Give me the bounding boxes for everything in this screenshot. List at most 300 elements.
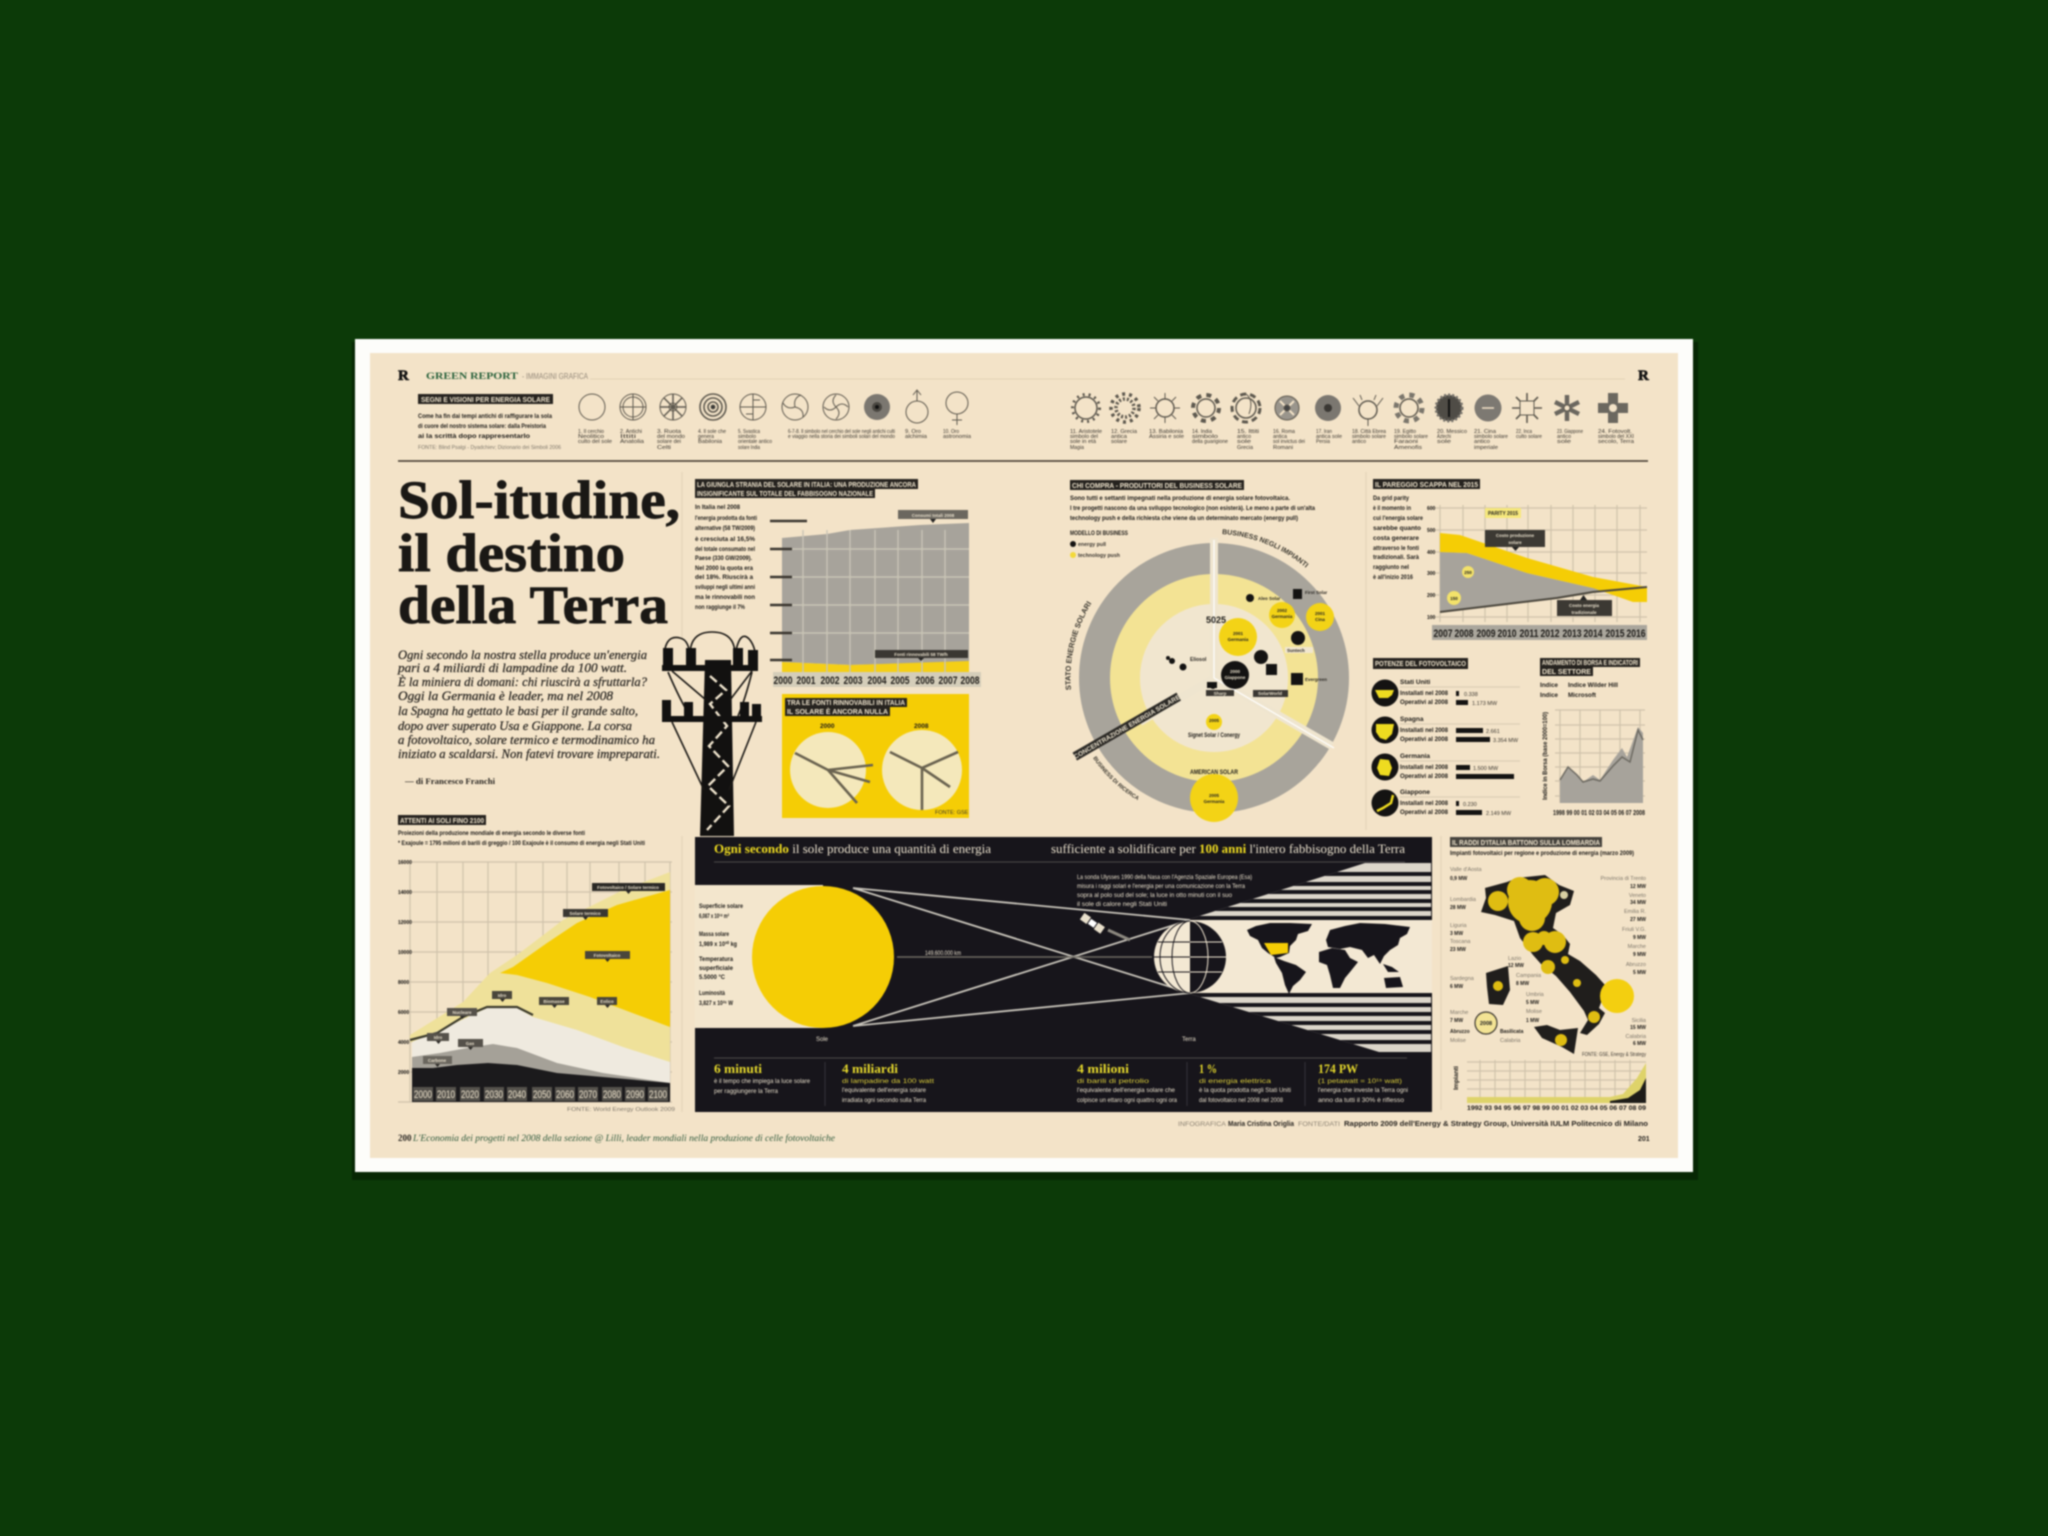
symbol labels right: 23. Giappone (1557, 429, 1583, 435)
chart text: del 18%. Riuscirà a (695, 574, 753, 581)
y axis labels: 8000 (398, 980, 409, 986)
sun facts: Superficie solare (699, 903, 743, 910)
stat: 174 PW: 174 PW (1318, 1061, 1358, 1076)
grid (1555, 710, 1645, 803)
panel: leading countries (1372, 658, 1520, 817)
text column: è il momento in (1373, 505, 1411, 512)
year labels: 2011 (1520, 628, 1538, 640)
symbol labels left: 9. Oro (905, 429, 921, 435)
intro paragraph: la Spagna ha gettato le basi per il grande salto, (398, 704, 638, 718)
symbol labels left: alchimia (905, 434, 928, 440)
row: Giappone: Operativi al 2008 (1400, 809, 1448, 816)
year labels: 2016 (1626, 628, 1646, 640)
callout labels: Idro (434, 1035, 443, 1040)
solar label (875, 650, 968, 661)
region labels right: Veneto (1629, 893, 1646, 899)
year axis: 2020 (461, 1089, 479, 1101)
y axis labels: 16000 (398, 860, 412, 866)
symbol labels right: 13. Babilonia (1149, 429, 1184, 435)
symbol labels left: culto del sole (578, 439, 612, 445)
symbol labels right: Aztechi (1437, 434, 1451, 440)
icon: male symbol (906, 390, 928, 423)
icon: sun 16 (1275, 396, 1299, 420)
row: Stati Uniti: 0.338 (1464, 692, 1478, 698)
symbol labels left (578, 429, 972, 451)
USA highlight (1264, 943, 1288, 955)
symbol labels right: antico (1474, 439, 1490, 445)
icon: triskele (782, 394, 808, 420)
callout labels: Biomasse (543, 999, 565, 1004)
region labels right: 15 MW (1630, 1025, 1646, 1031)
legend: Indice (1540, 682, 1558, 689)
bubble labels: Sharp (1214, 691, 1227, 696)
label: terra: Terra (1182, 1037, 1196, 1043)
axis title: Impianti (1453, 1066, 1460, 1090)
second series (1560, 730, 1643, 782)
heading tag: DEL SETTORE (1542, 669, 1591, 676)
stat: 1 percent: di energia elettrica (1199, 1078, 1272, 1085)
symbol labels right: simbolo solare (1394, 434, 1428, 440)
year axis: 2040 (508, 1089, 526, 1101)
panel: solar stocks chart (1540, 658, 1645, 817)
callout labels: Solare termico (569, 911, 601, 916)
logo left: R (398, 368, 409, 384)
chart text: Paese (330 GW/2009). (695, 555, 752, 562)
year axis: 2080 (603, 1089, 621, 1101)
region labels left: 6 MW (1450, 984, 1463, 990)
symbol labels left: del mondo (657, 434, 685, 440)
area: pale yellow (410, 872, 670, 1062)
yellow markers: 150 (1450, 596, 1458, 601)
main title: il destino (398, 523, 625, 583)
year labels: 2008 (960, 675, 980, 687)
yellow bubbles (1190, 602, 1334, 822)
region labels left: Abruzzo (1450, 1029, 1470, 1035)
symbol labels right: 17. Iran (1316, 429, 1332, 435)
stat: 174 PW: anno da tutti il 30% è riflesso (1318, 1098, 1405, 1104)
row: Spagna: Spagna (1400, 716, 1424, 723)
legend: Indice (1540, 692, 1558, 699)
year labels: 2012 (1540, 628, 1560, 640)
year labels (773, 672, 981, 687)
spoke line (1214, 540, 1334, 748)
bubble labels: 2000 (1230, 669, 1241, 674)
heading tag (418, 394, 553, 404)
gridlines (398, 862, 672, 1102)
main title (398, 470, 680, 635)
region labels left: 5 MW (1526, 1000, 1539, 1006)
light wedge (1187, 863, 1431, 1052)
symbol labels right: sole (1237, 439, 1251, 445)
stat dividers (825, 1062, 1305, 1106)
region labels left: Molise (1526, 1009, 1542, 1015)
region labels left: 3 MW (1450, 931, 1463, 937)
icon: cross circle (620, 394, 646, 420)
icon: cross with arcs (740, 394, 766, 420)
braces (672, 671, 756, 790)
symbol labels left: 10. Oro (943, 429, 959, 435)
upper crossarm (662, 665, 758, 671)
symbol labels left: astronomia (943, 434, 972, 440)
bubble labels: Eliosol (1190, 657, 1207, 663)
year axis: 2030 (485, 1089, 503, 1101)
satellite note: sopra al polo sud del sole; la luce in otto minuti con il suo (1077, 893, 1233, 899)
year labels: 2002 (820, 675, 840, 687)
white paper frame (355, 339, 1693, 1172)
bubble labels: 2001 (1315, 611, 1326, 616)
region labels left: 23 MW (1450, 947, 1466, 953)
year labels: 2007 (1434, 628, 1452, 640)
chart text: del totale consumato nel (695, 546, 755, 553)
cream behind sun (695, 885, 823, 1028)
section subtitle: - IMMAGINI GRAFICA (522, 372, 589, 381)
callout labels: Nucleare (452, 1010, 472, 1015)
text column: raggiunto nel (1373, 564, 1409, 571)
heading tag: ANDAMENTO DI BORSA E INDICATORI (1542, 660, 1638, 667)
legend: Microsoft (1568, 692, 1597, 699)
yellow tag: PARITY 2015 (1488, 511, 1518, 517)
solar label: Fonti rinnovabili 58 TW/h (894, 652, 948, 657)
trend area (1467, 1063, 1646, 1103)
dark line (410, 1007, 533, 1040)
stat: 1 percent (1199, 1061, 1291, 1104)
symbol row right (1072, 393, 1628, 426)
panel: industry circle (1064, 479, 1350, 823)
year axis: 2090 (626, 1089, 644, 1101)
sun facts: Massa solare (699, 931, 729, 938)
symbol labels right: 22. Inca (1516, 429, 1533, 435)
chart text: Nel 2000 la quota era (695, 565, 753, 572)
text column: cui l'energia solare (1373, 515, 1423, 522)
bubble labels: 2005 (1209, 718, 1220, 723)
legend (1070, 530, 1129, 559)
heading tag: POTENZE DEL FOTOVOLTAICO (1375, 661, 1466, 668)
chart text: non raggiunge il 7% (695, 604, 745, 611)
area: whitish (412, 1008, 670, 1102)
year axis: 2010 (437, 1089, 455, 1101)
black background (695, 837, 1432, 1112)
stat: 4 miliardi: irradiata ogni secondo sulla Terra (842, 1098, 927, 1104)
bubble labels: 2005 (1209, 793, 1220, 798)
distance label: 149.600.000 km (925, 951, 961, 957)
region labels left: Umbria (1526, 992, 1545, 998)
bubble labels: 2001 (1233, 631, 1244, 636)
text column: è all'inizio 2016 (1373, 574, 1413, 581)
row: Germania (1372, 753, 1514, 780)
intro paragraph: iniziato a scaldarsi. Non fatevi trovare impreparati. (398, 747, 660, 761)
heading tag: CHI COMPRA - PRODUTTORI DEL BUSINESS SOLARE (1072, 483, 1242, 490)
symbol labels right: sol invictus dei (1273, 439, 1305, 445)
callout labels: Fotovoltaico (594, 953, 621, 958)
region labels left: 12 MW (1508, 963, 1524, 969)
stat: 4 milioni: di barili di petrolio (1077, 1078, 1150, 1085)
year labels: 2004 (868, 675, 887, 687)
year axis: 2060 (556, 1089, 574, 1101)
credits: Maria Cristina Origlia (1228, 1121, 1294, 1128)
region labels left: Lazio (1508, 956, 1521, 962)
icon: sun 21 (1474, 394, 1502, 422)
stat: 6 minuti: 6 minuti (714, 1061, 762, 1076)
symbol labels left: solare India (738, 445, 761, 451)
region labels right: 9 MW (1633, 952, 1646, 958)
region labels left: Lombardia (1450, 897, 1477, 903)
callout labels: Fotovoltaico / Solare termico (597, 885, 659, 890)
credits: FONTE/DATI (1298, 1121, 1340, 1128)
icon: sun 23 (1555, 395, 1579, 421)
year axis (413, 1087, 668, 1101)
chart text: l'energia prodotta da fonti (695, 515, 757, 522)
intro paragraph: a fotovoltaico, solare termico e termodinamico ha (398, 733, 655, 747)
subtitle: Proiezioni della produzione mondiale di energia secondo le diverse fonti (398, 830, 585, 837)
source: FONTE: World Energy Outlook 2009 (567, 1107, 675, 1113)
settore label: 5025 (1206, 615, 1226, 625)
sun facts: 5.5000 °C (699, 973, 725, 981)
bubble labels: Cina (1315, 617, 1325, 622)
yellow markers (1447, 566, 1474, 605)
symbol labels right: simbolo solare (1474, 434, 1508, 440)
year labels: 2009 (1476, 628, 1496, 640)
grid (1428, 505, 1647, 622)
symbol labels right: Grecia (1237, 445, 1254, 451)
stat: 174 PW: l'energia che investe la Terra ogni (1318, 1088, 1408, 1094)
main title: Sol-itudine, (398, 470, 680, 530)
year labels: 2015 (1606, 628, 1624, 640)
black bubbles (1166, 589, 1305, 689)
symbol labels left: 5. Svastica (738, 429, 761, 435)
symbol labels right: sole (1557, 439, 1571, 445)
spokes (1140, 538, 1332, 746)
area: solar yellow (500, 890, 670, 1027)
intro paragraph: pari a 4 miliardi di lampadine da 100 watt. (397, 661, 627, 675)
bubble labels: SolarWorld (1258, 691, 1282, 696)
symbol labels right: Romani (1273, 445, 1293, 451)
stat: 4 milioni: l'equivalente dell'energia solare che (1077, 1088, 1176, 1094)
icon: sun 17 (1315, 395, 1341, 421)
total label (898, 510, 968, 523)
yellow box (782, 694, 969, 818)
world map (1247, 923, 1410, 994)
bubble labels: Germania (1204, 799, 1225, 804)
subtitle: * Exajoule = 1795 milioni di barili di greggio / 100 Exajoule è il consumo di energia negli Stati Uniti (398, 840, 645, 847)
region labels left: Molise (1450, 1038, 1466, 1044)
heading right: sufficiente a solidificare per 100 anni l'intero fabbisogno della Terra (1051, 841, 1405, 856)
stat: 6 minuti (714, 1061, 811, 1095)
description: di cuore del nostro sistema solare: dalla Preistoria (418, 423, 546, 430)
icon: sun 13 (1150, 393, 1180, 423)
callout labels: Eolico (600, 999, 614, 1004)
chart text (695, 504, 757, 611)
arc text: top right: BUSINESS NEGLI IMPIANTI (1222, 528, 1310, 568)
region labels right: 9 MW (1633, 935, 1646, 941)
source: FONTE: GSE (935, 810, 969, 816)
byline: — di Francesco Franchi (404, 776, 496, 786)
year labels: 2003 (844, 675, 862, 687)
symbol labels right: 12. Grecia (1111, 429, 1138, 435)
intro paragraph (397, 648, 660, 761)
bubble labels: Germania (1228, 637, 1249, 642)
icon: sun 24 cross (1598, 393, 1628, 423)
year labels: 2014 (1584, 628, 1603, 640)
icon: female symbol (946, 392, 968, 425)
stat: 1 percent: dal fotovoltaico nel 2008 nel 2008 (1199, 1098, 1284, 1104)
text column: sarebbe quanto (1373, 525, 1421, 532)
subtitle: Impianti fotovoltaici per regione e produzione di energia (marzo 2009) (1450, 850, 1634, 857)
icon: sun 14 (1193, 395, 1219, 421)
heading tag (1070, 480, 1244, 490)
intro paragraph: È la miniera di domani: chi riuscirà a sfruttarla? (397, 675, 648, 689)
chart text: alternative (58 TW/2009) (695, 525, 755, 532)
grey outer ring (1095, 559, 1333, 797)
y axis labels: 10000 (398, 950, 412, 956)
heading tag: INSIGNIFICANTE SUL TOTALE DEL FABBISOGNO NAZIONALE (697, 491, 873, 498)
symbol labels left: genera (698, 434, 715, 440)
main title: della Terra (398, 575, 668, 635)
national total (1475, 1012, 1497, 1034)
y axis (770, 521, 807, 660)
distance line (897, 956, 1152, 958)
symbol labels right: antico (1237, 434, 1251, 440)
row: Germania: 1.500 MW (1473, 766, 1499, 772)
region labels left: 1 MW (1526, 1018, 1539, 1024)
left chart: energy forecast to 2100 (398, 815, 675, 1113)
icon: circle (579, 394, 605, 420)
mini chart (1453, 1060, 1646, 1112)
national total: 2008 (1480, 1021, 1492, 1027)
source: FONTE: Blind Psalgi - Dyadchiev; Dizionario dei Simboli 2006 (418, 445, 561, 451)
text column (1373, 495, 1423, 581)
symbol labels right (1070, 429, 1635, 451)
legend (1540, 682, 1618, 699)
region labels right: 5 MW (1633, 970, 1646, 976)
credits: INFOGRAFICA (1178, 1121, 1227, 1128)
region labels right: Friuli V.G. (1622, 927, 1646, 933)
stripes (1187, 872, 1432, 1044)
icon: dark disc (864, 394, 890, 420)
region labels right: 12 MW (1630, 884, 1646, 890)
bubble labels: Giappone (1225, 675, 1246, 680)
dark area (1610, 1078, 1646, 1103)
row: Stati Uniti: 1.173 MW (1472, 701, 1498, 707)
bubble labels: AMERICAN SOLAR (1190, 769, 1238, 776)
symbol labels right: sole (1437, 439, 1451, 445)
heading tag (1373, 658, 1468, 669)
y axis labels: 300 (1427, 571, 1436, 577)
symbol labels left: Anatolia (620, 439, 645, 445)
symbol labels right: simbolo del (1070, 434, 1098, 440)
satellite beam (1108, 930, 1130, 940)
callout lower (1557, 595, 1612, 616)
total label: Consumi totali 2008 (912, 513, 955, 518)
dark line (1440, 587, 1647, 612)
intro paragraph: dopo aver superato Usa e Giappone. La corsa (398, 719, 632, 733)
y axis labels: 12000 (398, 920, 412, 926)
lower crossarm (662, 716, 762, 722)
panel: Italy map (1450, 837, 1647, 1112)
region labels left: Valle d'Aosta (1450, 867, 1482, 873)
tag (785, 698, 907, 716)
heading tag (1373, 479, 1480, 489)
pie 2008: 2008 (914, 723, 929, 730)
logo right: R (1638, 368, 1649, 384)
symbol labels right: 16. Roma (1273, 429, 1296, 435)
symbol labels left: 3. Ruota (657, 429, 682, 435)
arc text: left: STATO ENERGIE SOLARI (1064, 600, 1092, 691)
heading tag (1540, 658, 1640, 676)
symbol labels left: e viaggio nella storia dei simboli solari del mondo (788, 434, 895, 440)
region labels right: Provincia di Trento (1600, 876, 1646, 882)
y axis labels: 2000 (398, 1070, 409, 1076)
sun facts (699, 903, 743, 1007)
credits: Rapporto 2009 dell'Energy & Strategy Group, Università IULM Politecnico di Milano (1344, 1121, 1648, 1128)
heading tag (1450, 837, 1602, 847)
year axis: 1998 99 00 01 02 03 04 05 06 07 2008 (1553, 810, 1645, 817)
icon: sun 12 (1111, 394, 1139, 422)
callout upper: Costo produzione (1496, 533, 1535, 538)
y axis labels: 14000 (398, 890, 412, 896)
satellite note: misura i raggi solari e l'energia per una comunicazione con la Terra (1077, 884, 1246, 890)
text column: tradizionali. Sarà (1373, 554, 1419, 561)
row: Giappone: 2.149 MW (1486, 811, 1512, 817)
Sardinia (1486, 966, 1510, 1005)
row: Giappone (1372, 789, 1512, 817)
symbol labels right: Assiria e sole (1149, 434, 1184, 440)
mast (700, 660, 734, 836)
symbol labels right: solare (1111, 439, 1127, 445)
symbol labels right: antica (1273, 434, 1288, 440)
label: sole: Sole (816, 1037, 829, 1043)
description: technology push e della richiesta che viene da un determinato mercato (energy pull) (1070, 515, 1298, 522)
callout labels (423, 883, 665, 1067)
row: Stati Uniti: Installati nel 2008 (1400, 690, 1448, 697)
symbol labels right: 20. Messico (1437, 429, 1467, 435)
legend: technology push (1078, 553, 1121, 559)
callout lower: Costo energia (1569, 603, 1599, 608)
panel: black sun-earth infographic (695, 837, 1432, 1112)
row: Giappone: Installati nel 2008 (1400, 800, 1448, 807)
rotated tag: CONCENTRAZIONE ENERGIA SOLARE (1073, 694, 1182, 761)
symbol labels right: antica sole (1316, 434, 1342, 440)
chart text: In Italia nel 2008 (695, 504, 740, 511)
stat: 4 milioni: colpisce un ettaro ogni quattro ogni ora (1077, 1098, 1178, 1104)
row: Germania: Installati nel 2008 (1400, 764, 1448, 771)
text column: Da grid parity (1373, 495, 1409, 502)
credits (1178, 1121, 1648, 1128)
icon: sun 11 (1072, 394, 1100, 422)
lattice marks (707, 676, 729, 830)
satellite note: il sole di calore negli Stati Uniti (1077, 902, 1167, 908)
yellow band (782, 661, 969, 678)
region labels left: 28 MW (1450, 905, 1466, 911)
heading tag: IL RADDI D'ITALIA BATTONO SULLA LOMBARDIA (1452, 840, 1600, 847)
wires (664, 632, 756, 716)
year axis: 1992 93 94 95 96 97 98 99 00 01 02 03 04 05 06 07 08 09 (1467, 1105, 1646, 1112)
symbol labels left: 2. Antichi (620, 429, 642, 435)
arc text: lower left: BUSINESS DI RICERCA (1092, 756, 1140, 801)
legend: energy pull (1078, 542, 1106, 548)
sun (752, 886, 894, 1028)
year labels (1432, 625, 1647, 640)
heading tag: IL PAREGGIO SCAPPA NEL 2015 (1375, 482, 1478, 489)
icon: sun 20 (1436, 395, 1462, 421)
vertical dividers (681, 472, 683, 640)
region labels right: 34 MW (1630, 900, 1646, 906)
row: Stati Uniti: Operativi al 2008 (1400, 699, 1448, 706)
subtitle (398, 830, 645, 847)
bubble labels: Signet Solar / Conergy (1188, 732, 1240, 739)
symbol labels right: 21. Cina (1474, 429, 1497, 435)
panel: world solar pies (782, 694, 969, 818)
y axis labels: 100 (1427, 615, 1436, 621)
